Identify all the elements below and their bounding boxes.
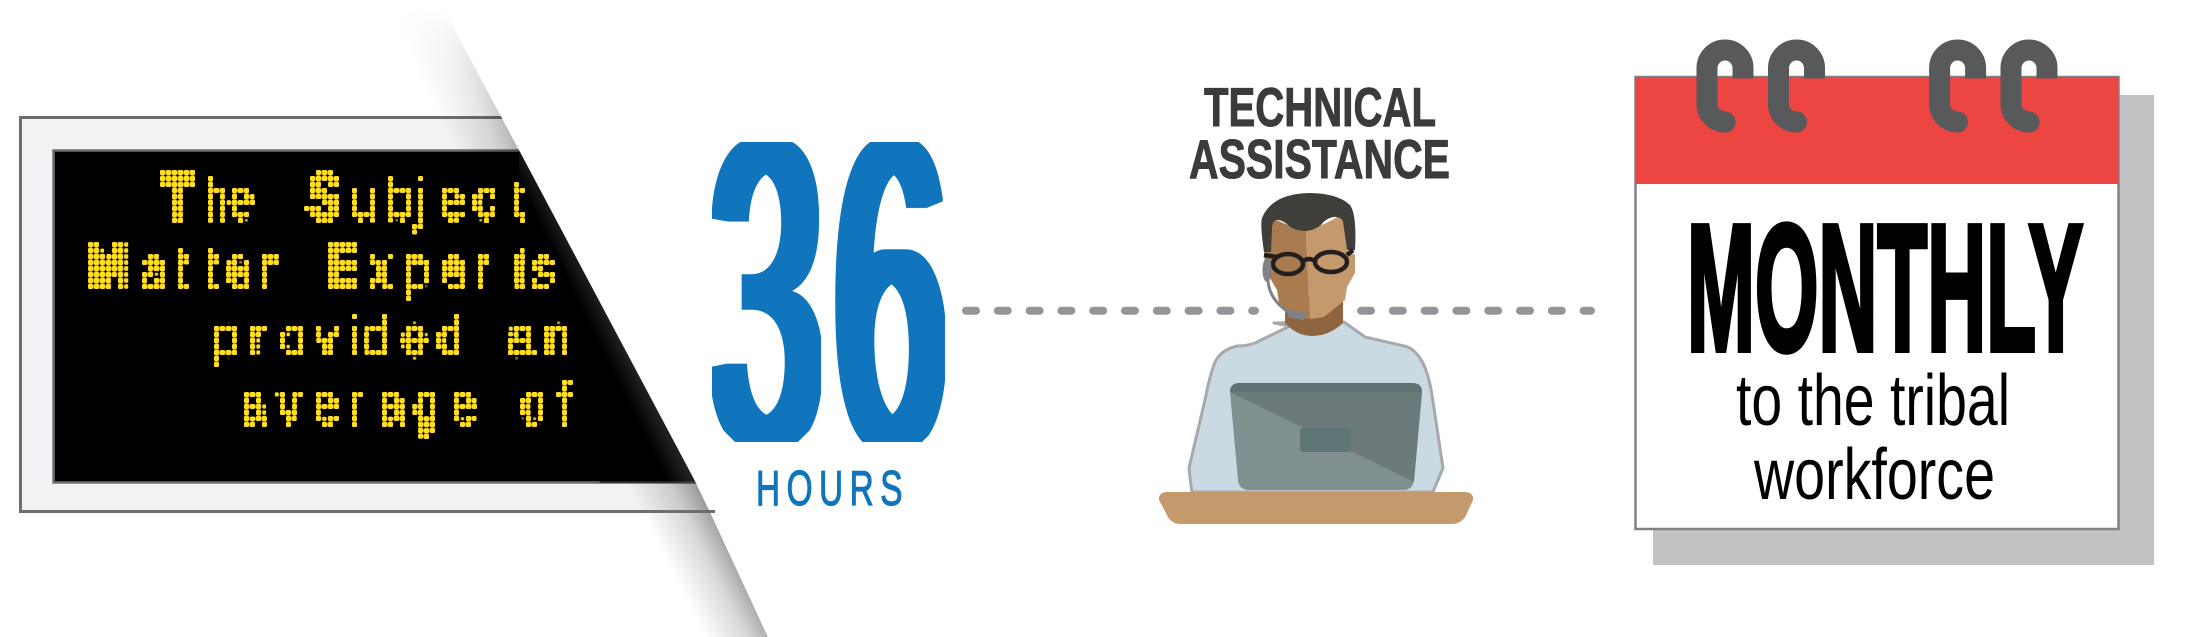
white page fold [439,0,1000,637]
calendar shadow [1653,95,2154,565]
sign black screen [54,150,774,482]
laptop [1230,383,1422,490]
heading: technical assistance: ASSISTANCE [1189,128,1450,190]
fold shadow [438,28,768,637]
icon: person at laptop [1159,193,1473,524]
face right [1306,214,1355,319]
sign message text: of [521,372,572,437]
sign message text: E [325,232,359,302]
headset [1262,258,1307,321]
calendar rings [1707,50,2047,132]
dotted connector [966,307,1591,315]
sign message text: an [508,304,570,369]
desk [1159,492,1473,524]
sign message text: T [162,163,193,233]
calendar caption [1736,361,2010,515]
hair [1261,193,1355,252]
sign message text: provided [213,304,463,369]
heading: technical assistance: TECHNICAL [1204,76,1436,138]
sign message text: ubject [350,167,526,232]
sign message text [85,163,572,437]
sign message text: atter [141,236,276,301]
calendar page [1636,77,2118,529]
sign outer frame [20,118,780,512]
heading: technical assistance [1189,76,1450,190]
glasses [1264,250,1353,274]
frame bottom line tip [640,510,715,513]
panel: calendar [1636,50,2154,565]
calendar red header [1636,77,2118,184]
panel: dot matrix sign [20,118,780,512]
fold highlight on screen [519,150,696,483]
sign message text: xperts [369,236,554,301]
sign message text: M [85,232,127,302]
sign message text: S [306,163,341,233]
shirt [1189,322,1443,492]
hours label: HOURS [756,461,909,516]
number 36: 36 [711,49,945,540]
calendar caption: to the tribal [1736,361,2010,441]
calendar caption: workforce [1753,435,1995,515]
neck [1285,295,1343,336]
sign message text: he [203,167,254,232]
sign message text: average [241,372,476,437]
face left [1264,218,1310,319]
